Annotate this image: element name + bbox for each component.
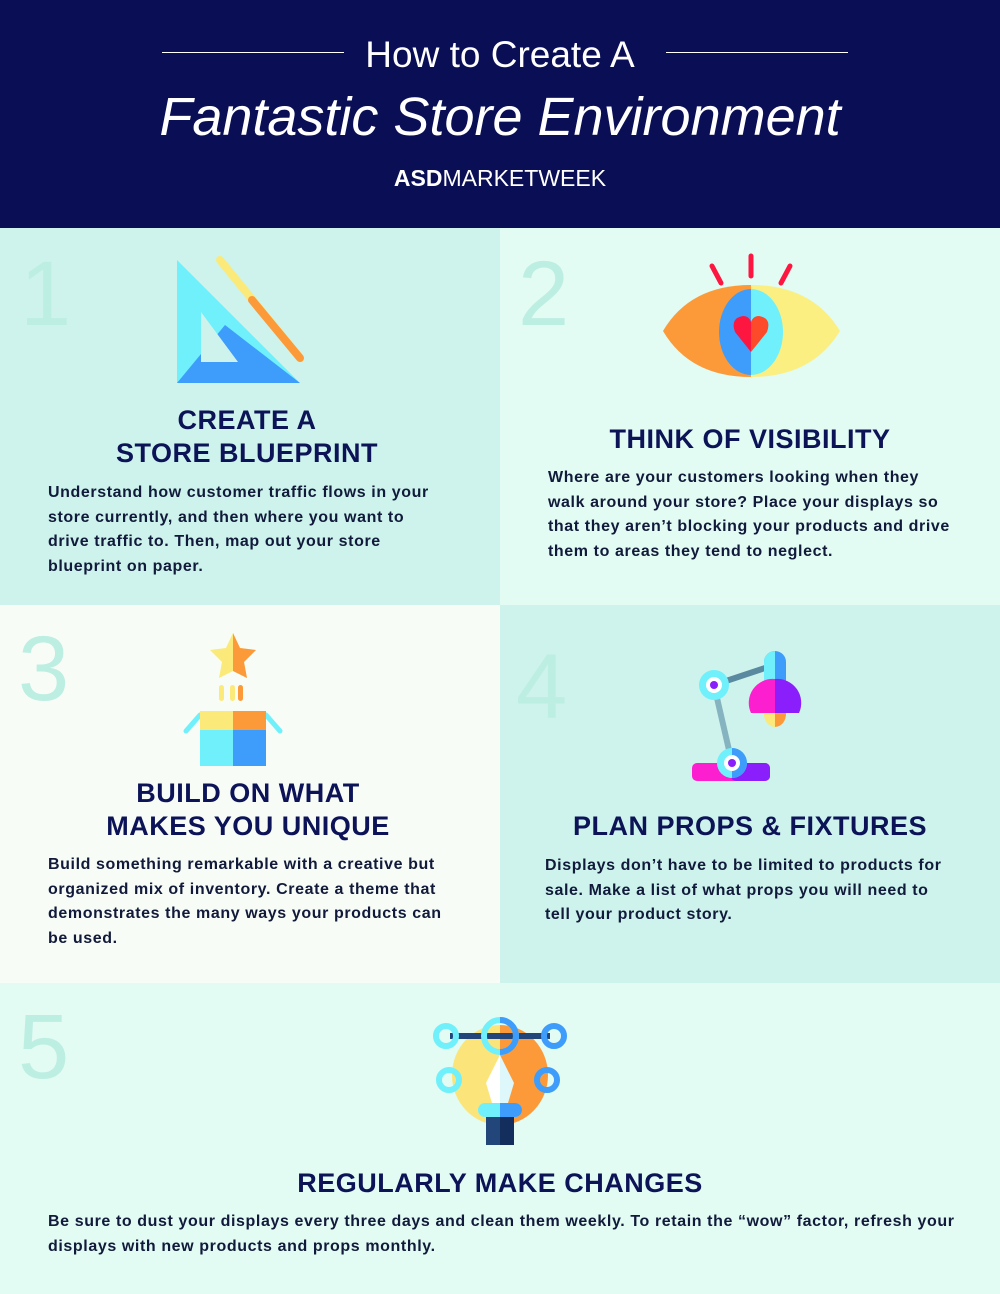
icon: gift box with star bbox=[184, 633, 282, 766]
number 4: 4 bbox=[516, 636, 567, 738]
heading 3: BUILD ON WHAT bbox=[136, 778, 360, 808]
panel: 2 bbox=[500, 228, 1000, 605]
heading 2: THINK OF VISIBILITY bbox=[609, 424, 890, 454]
panel: 5 bbox=[0, 983, 1000, 1294]
header rule right bbox=[666, 52, 848, 53]
panel: 3 bbox=[0, 605, 500, 983]
heading 4: PLAN PROPS & FIXTURES bbox=[573, 811, 927, 841]
icon: triangle ruler bbox=[177, 256, 304, 383]
title: Fantastic Store Environment bbox=[159, 87, 841, 147]
icon: pen tool bbox=[433, 1017, 567, 1145]
panel: 4 bbox=[500, 605, 1000, 983]
subtitle: How to Create A bbox=[365, 34, 635, 75]
heading 1: CREATE A bbox=[178, 405, 316, 435]
icon: desk lamp bbox=[692, 651, 802, 781]
text 2: Where are your customers looking when they walk around your store? Place your displays so that they aren’t blocking your products and drive them to areas they tend to neglect. bbox=[548, 469, 950, 560]
heading 1 bbox=[116, 405, 378, 468]
heading 1: STORE BLUEPRINT bbox=[116, 438, 378, 468]
heading 5: REGULARLY MAKE CHANGES bbox=[297, 1168, 703, 1198]
number 2: 2 bbox=[518, 243, 569, 345]
icon: eye bbox=[663, 254, 840, 377]
heading 3 bbox=[106, 778, 390, 841]
panel: 1 bbox=[0, 228, 500, 605]
number 3: 3 bbox=[18, 618, 69, 720]
text 4: Displays don’t have to be limited to products for sale. Make a list of what props you will need to tell your product story. bbox=[545, 857, 942, 923]
header bbox=[0, 0, 1000, 228]
text 5: Be sure to dust your displays every three days and clean them weekly. To retain the “wow” factor, refresh your displays with new products and props monthly. bbox=[48, 1213, 955, 1254]
text 1: Understand how customer traffic flows in your store currently, and then where you want to drive traffic to. Then, map out your store blueprint on paper. bbox=[48, 484, 429, 574]
heading 3: MAKES YOU UNIQUE bbox=[106, 811, 390, 841]
number 1: 1 bbox=[20, 243, 71, 345]
brand: ASDMARKETWEEK bbox=[394, 165, 606, 191]
header rule left bbox=[162, 52, 344, 53]
text 3: Build something remarkable with a creative but organized mix of inventory. Create a theme that demonstrates the many ways your products can be used. bbox=[48, 856, 442, 946]
number 5: 5 bbox=[18, 996, 69, 1098]
